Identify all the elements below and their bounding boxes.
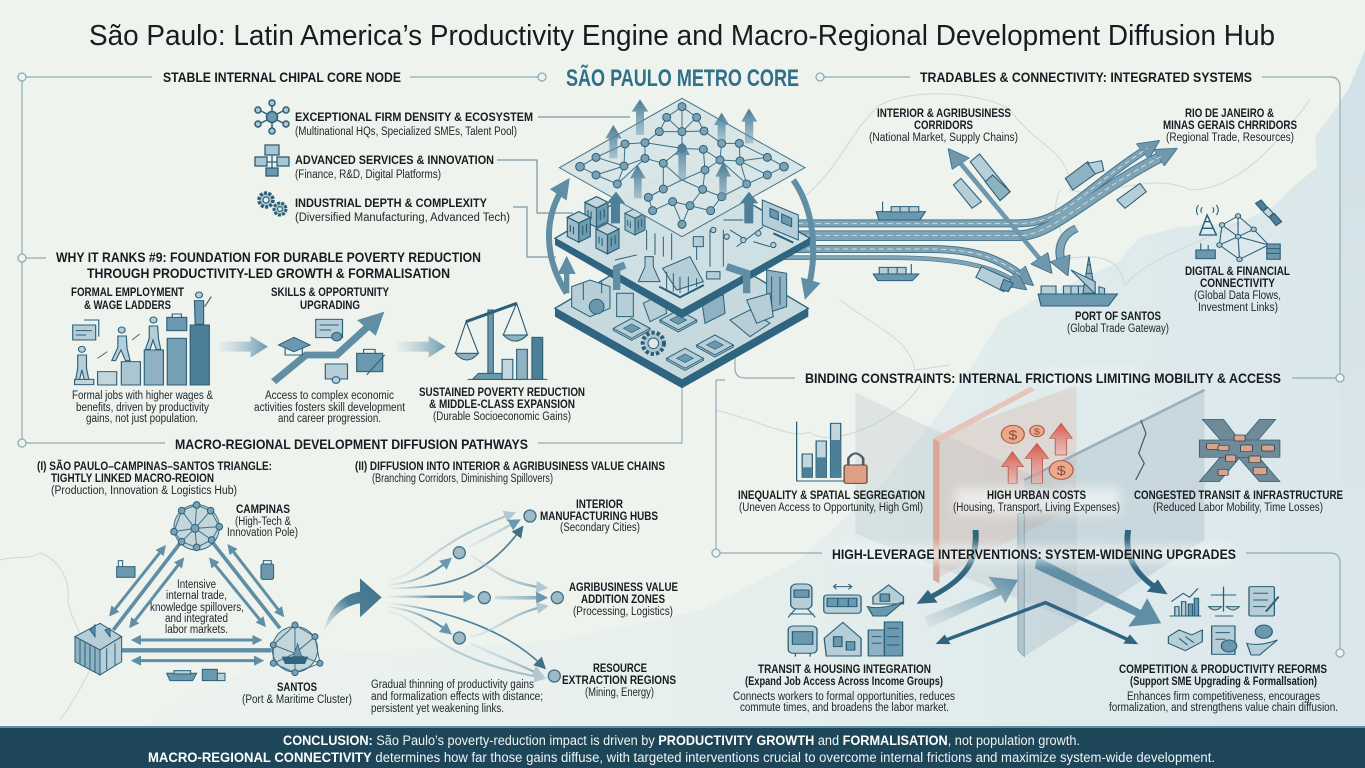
wall: red cost wall <box>933 385 1076 583</box>
text: resource regions: RESOURCE <box>593 661 647 675</box>
text: urban costs <box>953 488 1120 514</box>
text: diffusion heading: (II) DIFFUSION INTO INTERIOR & AGRIBUSINESS VALUE CHAINS <box>355 459 665 473</box>
text: resource regions <box>562 661 676 699</box>
heading: high-leverage interventions: HIGH-LEVERAGE INTERVENTIONS: SYSTEM-WIDENING UPGRADES <box>832 546 1236 562</box>
text: digital connectivity: (Global Data Flows, <box>1194 290 1281 302</box>
wall: left grey <box>856 393 1076 622</box>
text: triangle description: knowledge spillovers, <box>150 602 244 614</box>
icon: cargo ship lower <box>873 264 919 281</box>
icon: Santos port node <box>270 622 323 676</box>
text: interior corridors: CORRIDORS <box>914 118 973 132</box>
text: formal employment: benefits, driven by productivity <box>76 402 209 414</box>
text: port of Santos: PORT OF SANTOS <box>1075 309 1161 323</box>
icon: São Paulo city block <box>75 623 122 675</box>
text: Rio and Minas corridors <box>1163 106 1297 144</box>
text: triangle description <box>150 579 244 636</box>
icon: verified document <box>1212 626 1237 654</box>
text: formal employment: Formal jobs with higher wages & <box>72 390 213 402</box>
text: interior hubs <box>540 497 658 534</box>
curving links <box>617 265 625 290</box>
icon: monitor <box>762 200 798 243</box>
background map: outer ocean strip <box>1341 50 1365 727</box>
icon: wage ladder bars <box>75 325 209 385</box>
icon: services monitors <box>255 145 289 176</box>
icon: house in hand <box>867 585 903 616</box>
text: triangle description: internal trade, <box>166 590 227 602</box>
text: formal employment: gains, not just population. <box>86 413 198 425</box>
text: diffusion heading <box>355 459 665 485</box>
text: interior hubs: INTERIOR <box>576 497 623 511</box>
icon: rising costs: $ <box>1057 465 1066 478</box>
text: agribusiness zones: ADDITION ZONES <box>581 592 665 606</box>
icon: van <box>1117 183 1146 208</box>
text: Rio and Minas corridors: (Regional Trade, Resources) <box>1166 132 1294 144</box>
arrow: wide up-right <box>925 577 1018 628</box>
text: industrial depth: INDUSTRIAL DEPTH & COMPLEXITY <box>295 196 487 210</box>
chart: diffusion branches <box>323 510 563 682</box>
text: transit and housing integration: (Expand Job Access Across Income Groups) <box>745 676 943 688</box>
text: transit and housing integration: TRANSIT & HOUSING INTEGRATION <box>758 662 931 676</box>
text: Santos <box>242 680 352 706</box>
text: transit and housing integration: commute times, and broadens the labor market. <box>740 702 949 714</box>
icon: truck lower <box>976 267 1013 292</box>
frame connector lines <box>18 73 1344 657</box>
heading: diffusion pathways: MACRO-REGIONAL DEVELOPMENT DIFFUSION PATHWAYS <box>175 436 528 452</box>
text: firm density: EXCEPTIONAL FIRM DENSITY & ECOSYSTEM <box>295 110 533 124</box>
layer: services and innovation <box>555 163 810 318</box>
heading: stable internal core node: STABLE INTERNAL CHIPAL CORE NODE <box>163 69 401 85</box>
icon: bus with arrows <box>824 584 861 613</box>
icon: diploma <box>325 364 347 383</box>
illustration: barrier walls and intervention arrows <box>788 385 1280 657</box>
diagram: São Paulo-Campinas-Santos triangle <box>75 502 323 681</box>
text: industrial depth detail: (Diversified Manufacturing, Advanced Tech) <box>295 212 510 224</box>
text: Rio and Minas corridors: MINAS GERAIS CHRRIDORS <box>1163 118 1297 132</box>
text: gradual thinning: and formalization effects with distance; <box>371 691 543 703</box>
text: skills upgrading: and career progression. <box>278 413 381 425</box>
icon: rising costs: $ <box>1034 427 1041 437</box>
text: triangle description: Intensive <box>177 579 216 591</box>
icon: flask <box>638 257 660 282</box>
text: congested transit: (Reduced Labor Mobility, Time Losses) <box>1153 502 1323 514</box>
panel: conclusion banner <box>0 726 1365 768</box>
text: Campinas: CAMPINAS <box>236 502 290 516</box>
text: competition reforms: COMPETITION & PRODUCTIVITY REFORMS <box>1119 662 1327 676</box>
text: digital connectivity: CONNECTIVITY <box>1200 276 1275 290</box>
icon: Campinas network node <box>171 502 223 551</box>
icon: briefcase <box>167 314 187 331</box>
layer: industrial base <box>555 233 808 388</box>
text: inequality <box>738 488 925 514</box>
text: sustained poverty reduction: & MIDDLE-CLASS EXPANSION <box>429 397 575 411</box>
text: competition reforms: (Support SME Upgrading & Formallsation) <box>1130 676 1317 688</box>
text: triangle heading: TIGHTLY LINKED MACRO-REOION <box>51 471 214 485</box>
panel: core node layer labels <box>255 100 630 257</box>
arrow: step two to three <box>396 336 446 358</box>
text: resource regions: (Mining, Energy) <box>585 687 654 699</box>
text: triangle heading: (I) SÃO PAULO–CAMPINAS–SANTOS TRIANGLE: <box>37 458 272 473</box>
layer: firm network <box>559 98 805 237</box>
panel: foundation icons <box>73 292 547 385</box>
text: skills upgrading: SKILLS & OPPORTUNITY <box>271 285 389 299</box>
icon: scales and bars <box>455 303 547 379</box>
icon: hand with globe <box>1247 625 1277 655</box>
arrow: triangle to diffusion <box>323 578 382 633</box>
text: inequality: (Uneven Access to Opportunity, High Gml) <box>739 502 923 514</box>
icon: gears <box>259 193 286 215</box>
background map: ocean <box>143 50 1365 727</box>
icon: certificate <box>316 319 343 341</box>
text: digital connectivity <box>1185 264 1290 314</box>
text: triangle description: and integrated <box>165 613 228 625</box>
text: formal employment: & WAGE LADDERS <box>84 298 171 312</box>
arrow: step one to two <box>218 336 268 358</box>
illustration: layered metro core stack <box>549 98 813 388</box>
title: São Paulo: Latin America’s Productivity Engine and Macro-Regional Development Diffusion Hub <box>89 20 1275 52</box>
text: sustained poverty reduction <box>419 385 585 423</box>
text: interior hubs: MANUFACTURING HUBS <box>540 509 658 523</box>
icon: bar chart with padlock <box>797 422 867 483</box>
wall: right grey cracked <box>1018 390 1204 657</box>
text: formal employment: FORMAL EMPLOYMENT <box>71 285 185 299</box>
text: Santos: (Port & Maritime Cluster) <box>242 694 352 706</box>
icon: growth chart <box>1170 588 1201 616</box>
text: Campinas <box>227 502 298 539</box>
icon: firm network hub <box>255 100 289 134</box>
icon: checklist <box>1249 587 1279 616</box>
arrow: circular flow left <box>549 185 567 293</box>
text: skills upgrading: activities fosters skill development <box>254 402 406 414</box>
text: interior hubs: (Secondary Cities) <box>560 522 640 534</box>
text: conclusion line two: MACRO-REGIONAL CONNECTIVITY determines how far those gains diffuse, with targeted interventions crucial to overcome internal frictions and maximize system-wide development. <box>148 750 1215 765</box>
icon: digital network tower satellite <box>1196 200 1282 262</box>
heading: why it ranks: WHY IT RANKS #9: FOUNDATION FOR DURABLE POVERTY REDUCTION <box>56 249 481 265</box>
icon: graduation cap <box>279 337 310 355</box>
icons: climbing workers <box>76 292 211 379</box>
text: inequality: INEQUALITY & SPATIAL SEGREGATION <box>738 488 925 502</box>
heading: why it ranks: THROUGH PRODUCTIVITY-LED GROWTH & FORMALISATION <box>87 265 450 281</box>
heading: tradables and connectivity: TRADABLES & CONNECTIVITY: INTEGRATED SYSTEMS <box>920 69 1252 85</box>
text: interior corridors <box>869 106 1018 144</box>
text: interior corridors: INTERIOR & AGRIBUSINESS <box>877 106 1011 120</box>
icon: port of Santos ship and crane <box>1038 257 1118 306</box>
text: gradual thinning <box>371 679 543 715</box>
text: agribusiness zones: (Processing, Logistics) <box>573 606 673 618</box>
text: gradual thinning: persistent yet weakening links. <box>371 703 504 715</box>
text: formal employment <box>71 285 213 425</box>
text: digital connectivity: DIGITAL & FINANCIAL <box>1185 264 1290 278</box>
icon: portfolio <box>357 349 385 375</box>
text: transit and housing integration: Connects workers to formal opportunities, reduces <box>733 691 955 703</box>
text: skills upgrading: UPGRADING <box>300 298 360 312</box>
icon: truck upper <box>1065 161 1104 190</box>
text: transit and housing integration <box>733 662 955 714</box>
label glow behind text <box>838 370 1234 562</box>
text: sustained poverty reduction: (Durable Socioeconomic Gains) <box>433 411 571 423</box>
icon: bus <box>953 178 981 208</box>
icon: rising costs <box>1001 423 1073 483</box>
arrow: circular flow right <box>793 180 813 292</box>
icon: document <box>73 320 99 340</box>
arrows: upward growth <box>605 99 758 223</box>
text: diffusion heading: (Branching Corridors, Diminishing Spillovers) <box>372 473 553 485</box>
text: congested transit <box>1134 488 1343 514</box>
text: resource regions: EXTRACTION REGIONS <box>562 673 676 687</box>
arrows: triangle links <box>112 543 282 661</box>
arrow: curve to reforms <box>1127 530 1160 590</box>
icon: city buildings <box>868 622 903 656</box>
text: advanced services detail: (Finance, R&D, Digital Platforms) <box>295 169 441 181</box>
text: Campinas: Innovation Pole) <box>227 527 298 539</box>
icon: handshake <box>1168 630 1202 651</box>
text: urban costs: (Housing, Transport, Living Expenses) <box>953 502 1120 514</box>
text: triangle heading: (Production, Innovation & Logistics Hub) <box>51 485 237 497</box>
text: Campinas: (High-Tech & <box>235 516 291 528</box>
text: competition reforms: Enhances firm competitiveness, encourages <box>1127 691 1320 703</box>
text: port of Santos <box>1067 309 1169 335</box>
text: gradual thinning: Gradual thinning of productivity gains <box>371 679 534 691</box>
text: interior corridors: (National Market, Supply Chains) <box>869 132 1018 144</box>
icon: congested crossroad <box>1199 419 1280 482</box>
text: triangle heading <box>37 458 272 497</box>
arrow: two-way link <box>942 603 1132 642</box>
icon: city bus front <box>788 626 817 657</box>
leader lines to layers <box>497 117 630 257</box>
arrow: curve to transit <box>925 530 976 600</box>
icon: train <box>788 584 815 617</box>
arrow: rising skills <box>274 318 377 382</box>
text: agribusiness zones <box>569 580 678 618</box>
text: conclusion line one: CONCLUSION: São Paulo’s poverty-reduction impact is driven by PRODUCTIVITY GROWTH and FORMALISATION, not population growth. <box>283 733 1080 748</box>
icon: apartment house <box>824 622 861 656</box>
chart: tradables road corridors <box>780 148 1282 306</box>
arrow: wide down-right <box>1035 557 1161 627</box>
text: competition reforms <box>1109 662 1338 714</box>
text: digital connectivity: Investment Links) <box>1198 302 1278 314</box>
text: skills upgrading: Access to complex economic <box>265 390 394 402</box>
icon: ship and truck <box>167 669 225 681</box>
text: Rio and Minas corridors: RIO DE JANEIRO & <box>1185 106 1274 120</box>
heading: why it ranks <box>56 249 481 281</box>
icon: bank <box>659 257 704 297</box>
text: advanced services: ADVANCED SERVICES & INNOVATION <box>295 153 494 167</box>
text: urban costs: HIGH URBAN COSTS <box>987 488 1086 502</box>
icon: rising costs: $ <box>1008 429 1017 443</box>
icon: goods jar <box>261 561 274 579</box>
icon: justice scale <box>1209 587 1239 616</box>
text: Santos: SANTOS <box>277 680 317 694</box>
icon: train <box>970 154 1010 201</box>
heading: binding constraints: BINDING CONSTRAINTS: INTERNAL FRICTIONS LIMITING MOBILITY & ACCESS <box>805 370 1281 386</box>
text: sustained poverty reduction: SUSTAINED POVERTY REDUCTION <box>419 385 585 399</box>
text: skills upgrading <box>254 285 406 425</box>
background map: regional borders <box>0 94 1310 720</box>
icon: cargo ship upper <box>876 202 925 220</box>
text: firm density detail: (Multinational HQs, Specialized SMEs, Talent Pool) <box>295 126 517 138</box>
text: triangle description: labor markets. <box>165 624 228 636</box>
heading: São Paulo metro core: SÃO PAULO METRO CORE <box>566 64 799 92</box>
text: port of Santos: (Global Trade Gateway) <box>1067 323 1169 335</box>
icon: factory link <box>117 561 135 577</box>
text: agribusiness zones: AGRIBUSINESS VALUE <box>569 580 678 594</box>
